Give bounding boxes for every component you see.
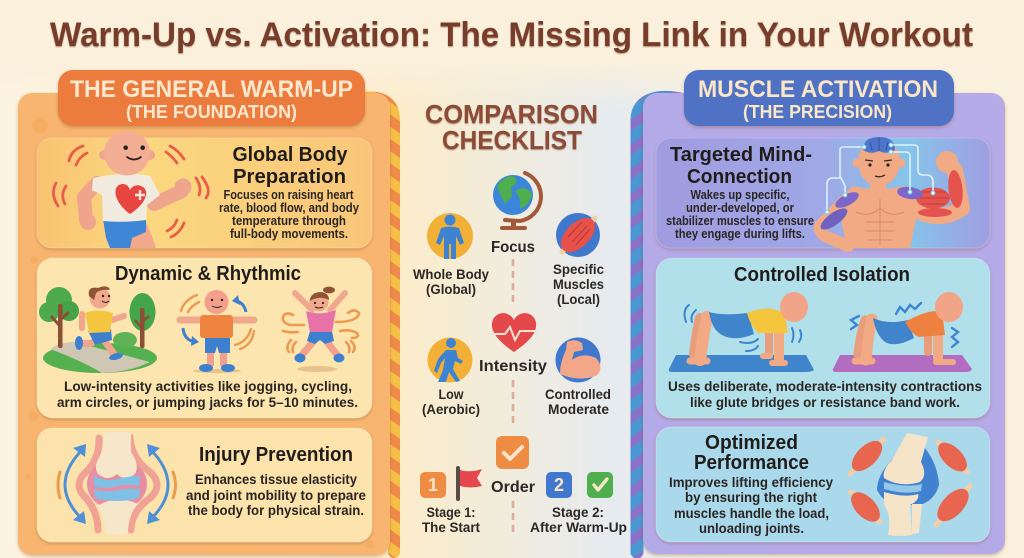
header tab: THE GENERAL WARM-UP [70,76,353,103]
text: controlled isolation: Uses deliberate, moderate-intensity contractions [668,378,982,394]
title: Warm-Up vs. Activation: The Missing Link in Your Workout [50,16,973,54]
icon: stage 1 badge [420,472,446,498]
text: optimized performance [669,432,833,536]
icon: flexed arm [556,338,600,382]
icon: flag [456,466,482,501]
text: global body preparation: full-body movements. [230,226,348,241]
icon: knee with surrounding muscles [846,433,974,536]
text: controlled isolation [668,378,982,410]
text: optimized performance: Performance [694,452,809,474]
header tab: (THE PRECISION) [743,102,892,122]
header tab [58,70,365,126]
label: specific muscles: (Local) [557,292,600,307]
icon: order check box [496,436,529,469]
icon: glute bridge on blue mat [669,292,814,372]
text: global body preparation: Focuses on raising heart [224,187,354,202]
text: global body preparation: Global Body [232,144,348,166]
text: injury prevention: the body for physical strain. [188,502,364,518]
text: injury prevention [186,444,366,518]
card: targeted mind-muscle connection [656,137,990,248]
label: low aerobic [422,387,480,417]
card: dynamic and rhythmic [37,258,372,418]
header tab: MUSCLE ACTIVATION [698,76,938,103]
label: stage 2: After Warm-Up [530,520,627,535]
text: targeted mind-connection: stabilizer muscles to ensure [666,213,814,228]
heading: Dynamic & Rhythmic [115,263,301,285]
label: stage 1: The Start [422,520,480,535]
icon: glute bridge on purple mat [833,292,972,372]
text: injury prevention: Enhances tissue elasticity [195,471,357,487]
label: order: Order [491,479,535,496]
text: optimized performance: by ensuring the right [685,489,817,505]
card: global body preparation [37,130,372,248]
panel: general warm-up [18,70,394,555]
icon: whole body [427,213,473,259]
icon: running figure with heart [53,130,208,248]
label: controlled moderate [545,387,611,417]
text: controlled isolation: like glute bridges or resistance band work. [690,394,960,410]
text: targeted mind-connection: they engage during lifts. [675,226,805,241]
text: dynamic and rhythmic [57,378,358,410]
text: optimized performance: Optimized [705,432,798,454]
header tab [684,70,954,126]
label: specific muscles: Muscles [553,277,604,292]
text: global body preparation [219,144,360,241]
text: targeted mind-connection: under-developed, or [686,200,794,215]
icon: green check [587,472,613,498]
panel background [643,93,1005,554]
heading: comparison checklist: CHECKLIST [442,125,582,155]
text: optimized performance: muscles handle the load, [674,505,829,521]
icon: muscular figure with brain [818,137,964,248]
text: optimized performance: Improves lifting efficiency [669,474,833,490]
heading: Controlled Isolation [734,264,910,286]
panel: comparison checklist [413,99,627,535]
icon: walking figure [428,338,472,382]
text: global body preparation: Preparation [233,166,346,188]
text: injury prevention: and joint mobility to prepare [186,487,366,503]
icon: arm circles figure [180,290,254,373]
label: intensity: Intensity [479,358,547,375]
label: stage 1: Stage 1: [426,505,476,520]
label: controlled moderate: Controlled [545,387,611,402]
icon: globe [493,173,541,230]
text: targeted mind-connection: Wakes up specific, [690,187,790,202]
icon: stage 1 badge: 1 [428,475,438,495]
text: targeted mind-connection: Targeted Mind- [670,144,812,166]
card: injury prevention [37,428,372,542]
label: specific muscles [553,262,604,307]
icon: knee joint with arrows [58,432,176,536]
text: optimized performance: unloading joints. [699,520,804,536]
icon: jumping jack figure [283,287,359,372]
card: optimized performance [656,427,990,542]
label: stage 1 [422,505,480,535]
label: low aerobic: Low [438,387,464,402]
label: stage 2 [530,505,627,535]
icon: stage 2 badge [546,472,572,498]
text: dynamic and rhythmic: Low-intensity activities like jogging, cycling, [64,378,352,394]
text: targeted mind-connection [666,144,814,241]
icon: specific muscle [555,212,601,258]
heading: comparison checklist: COMPARISON [425,99,598,129]
panel: muscle activation [637,70,1005,554]
header tab: (THE FOUNDATION) [126,102,297,122]
icon: stage 2 badge: 2 [554,475,564,495]
label: whole body: Whole Body [413,267,489,282]
label: whole body [413,267,489,297]
heading: comparison checklist [425,99,598,155]
label: stage 2: Stage 2: [552,505,604,520]
text: targeted mind-connection: Connection [687,166,792,188]
label: specific muscles: Specific [553,262,604,277]
text: global body preparation: rate, blood flow, and body [219,200,360,215]
label: low aerobic: (Aerobic) [422,402,480,417]
icon: jogger in park [39,286,157,373]
text: injury prevention: Injury Prevention [199,444,353,466]
icon: heart with pulse [488,313,538,352]
rope: orange and yellow [364,98,394,552]
label: controlled moderate: Moderate [548,402,609,417]
text: global body preparation: temperature through [232,213,346,228]
card: controlled isolation [656,258,990,418]
panel background [18,93,390,555]
text: dynamic and rhythmic: arm circles, or jumping jacks for 5–10 minutes. [57,394,358,410]
rope: blue and purple [637,97,684,552]
label: focus: Focus [491,239,535,256]
label: whole body: (Global) [426,282,476,297]
